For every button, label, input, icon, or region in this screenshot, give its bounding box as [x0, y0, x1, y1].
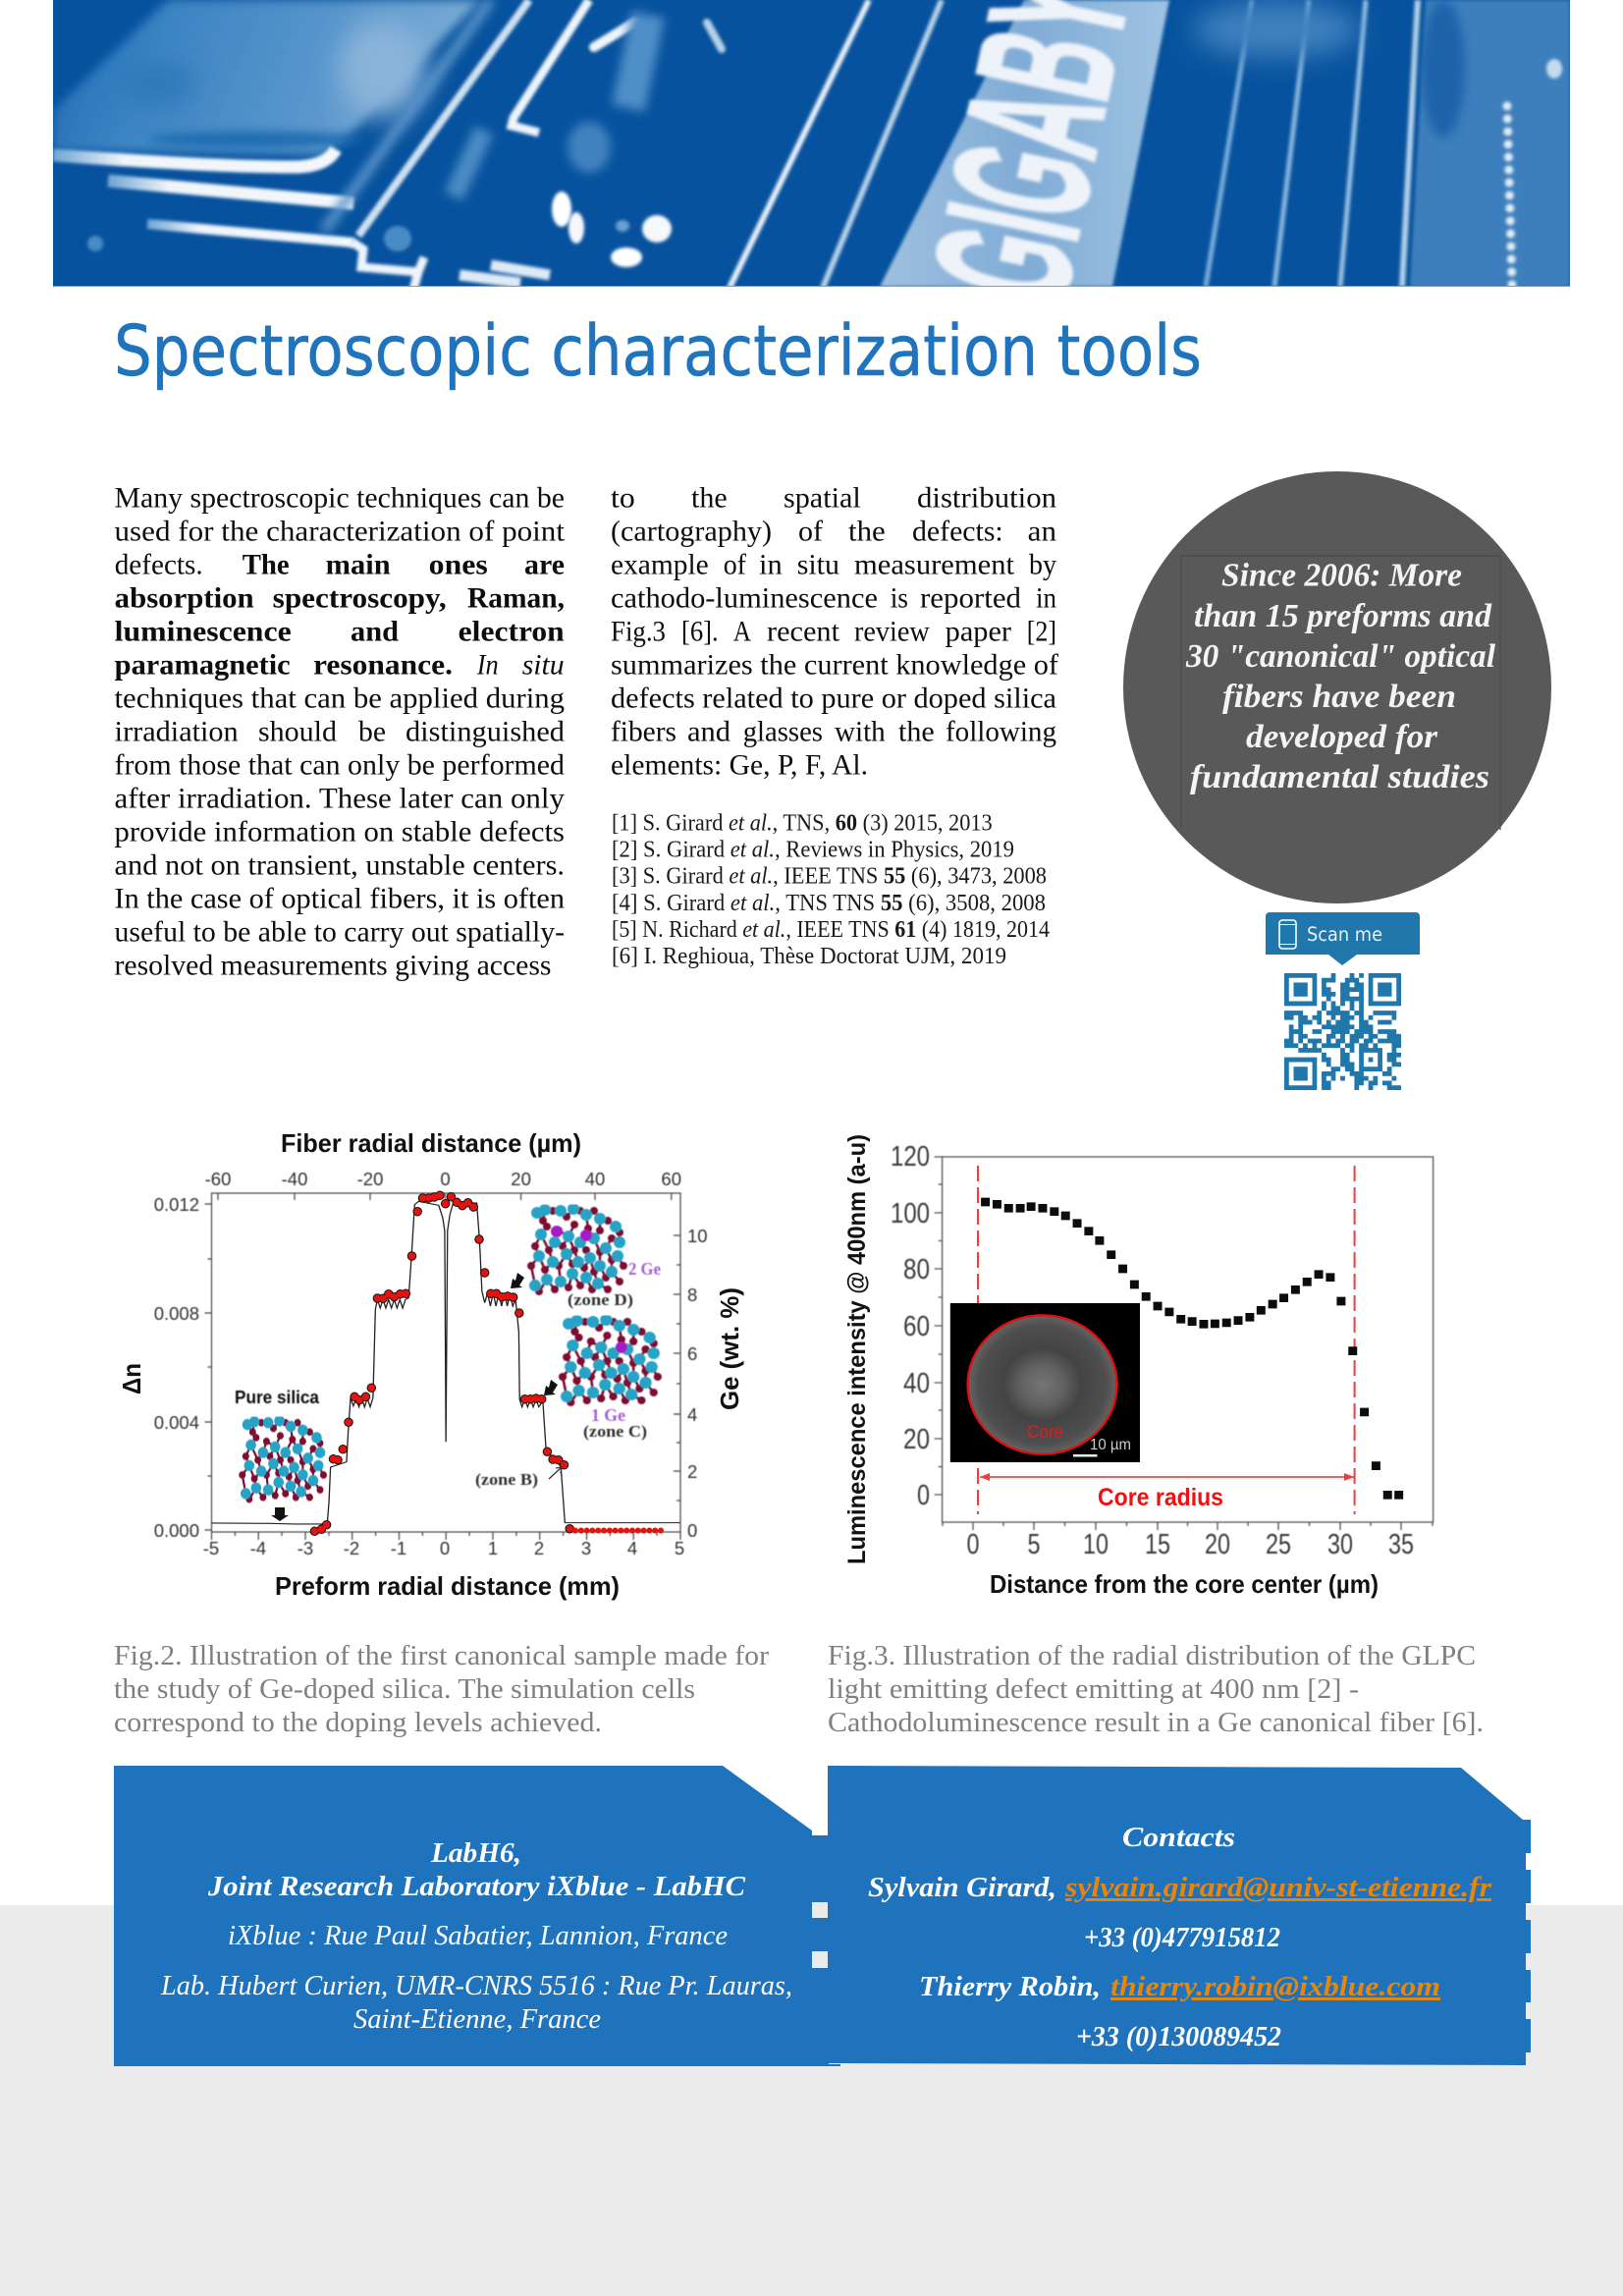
references list — [612, 810, 1050, 969]
top axis title: Fiber radial distance (µm) — [281, 1128, 581, 1158]
address text: Saint-Etienne, France — [353, 2003, 601, 2035]
caption: Fig.3 — [828, 1641, 1484, 1738]
text block: second body column: cathodo-luminescence — [611, 582, 878, 615]
axis tick labels: 20 — [511, 1169, 531, 1189]
inset: cathodoluminescence image — [950, 1303, 1140, 1462]
text block: second body column: summarizes the current knowledge of — [611, 649, 1058, 682]
text block: first body column: defects. — [115, 549, 203, 581]
text block: first body column: ones — [429, 549, 488, 581]
text block: second body column — [611, 482, 1058, 782]
text block: second body column: by — [1029, 549, 1056, 581]
text block: first body column: should — [258, 716, 337, 748]
text block: second body column: following — [946, 716, 1056, 748]
core radius arrow — [980, 1473, 1354, 1481]
text block: second body column: paper — [946, 616, 1011, 648]
text block: second body column: A — [733, 616, 751, 648]
axis tick labels: -1 — [391, 1538, 406, 1558]
text block: second body column: the — [898, 716, 935, 748]
axis tick labels: -2 — [344, 1538, 359, 1558]
x axis title: Distance from the core center (µm) — [990, 1569, 1379, 1599]
scan me tag: Scan me — [1307, 923, 1382, 946]
text block: second body column: with — [835, 716, 886, 748]
red dashed core limits — [978, 1166, 1355, 1514]
address text: Joint Research Laboratory iXblue - LabHC — [207, 1871, 746, 1902]
caption: Fig.3: Fig.3. Illustration of the radial distribution of the GLPC — [828, 1641, 1476, 1671]
axis tick labels: 0 — [440, 1169, 451, 1189]
annotation labels: 2 Ge — [628, 1259, 661, 1279]
axis tick labels: -40 — [282, 1169, 307, 1189]
axis tick labels: -3 — [298, 1538, 313, 1558]
address text: LabH6, — [430, 1837, 521, 1869]
callout text — [1185, 558, 1496, 795]
QR code — [1284, 973, 1401, 1090]
axis tick labels: 0 — [687, 1520, 697, 1541]
axis tick labels: 80 — [903, 1254, 930, 1285]
text block: first body column: electron — [459, 616, 565, 648]
text block: second body column: of — [798, 516, 823, 548]
caption: Fig.3: light emitting defect emitting at 400 nm [2] - — [828, 1674, 1359, 1705]
caption: Fig.2: Fig.2. Illustration of the first canonical sample made for — [114, 1641, 770, 1671]
core radius label: Core radius — [1098, 1484, 1223, 1511]
text block: second body column: to — [611, 482, 635, 515]
contact text: Sylvain Girard, — [868, 1872, 1056, 1903]
text block: first body column: techniques that can be applied during — [114, 683, 565, 715]
address text: Lab. Hubert Curien, UMR-CNRS 5516 : Rue Pr. Lauras, — [160, 1970, 792, 2001]
references list: [5] N. Richard et al., IEEE TNS 61 (4) 1819, 2014 — [612, 917, 1050, 943]
text block: first body column: are — [524, 549, 565, 581]
contact text: sylvain.girard@univ-st-etienne.fr — [1064, 1872, 1492, 1903]
inset: cathodoluminescence image: 10 µm — [1090, 1437, 1131, 1453]
text block: second body column: an — [1028, 516, 1056, 548]
contact text: +33 (0)130089452 — [1076, 2021, 1281, 2052]
text block: second body column: (cartography) — [611, 516, 772, 548]
text block: first body column: and — [351, 616, 399, 648]
text block: second body column: the — [848, 516, 886, 548]
text block: first body column: luminescence — [115, 616, 292, 648]
caption: Fig.2: the study of Ge-doped silica. The simulation cells — [114, 1674, 695, 1705]
inset: cathodoluminescence image: Core — [1027, 1422, 1063, 1442]
red data markers — [314, 1195, 666, 1531]
text block: first body column: from those that can only be performed — [114, 749, 565, 782]
axis tick labels: 100 — [891, 1198, 930, 1230]
icon: phone — [1279, 920, 1296, 949]
callout text: 30 "canonical" optical — [1185, 638, 1496, 675]
text block: first body column: and not on transient, unstable centers. — [114, 849, 565, 882]
scan me tag — [1266, 912, 1420, 965]
text block: first body column: useful to be able to carry out spatially- — [114, 916, 565, 949]
axis tick labels: -5 — [203, 1538, 219, 1558]
text block: second body column: Fig.3 — [611, 616, 666, 648]
text block: first body column: Raman, — [467, 582, 565, 615]
axis tick labels: 40 — [585, 1169, 605, 1189]
text block: first body column: provide information on stable defects — [114, 816, 565, 848]
contact text: Contacts — [1122, 1822, 1235, 1853]
callout: grey circle — [1123, 471, 1551, 903]
text block: second body column: defects related to pure or doped silica — [611, 683, 1056, 715]
text block: second body column: spatial — [784, 482, 861, 515]
references list: [4] S. Girard et al., TNS TNS 55 (6), 3508, 2008 — [612, 891, 1046, 916]
text block: first body column: paramagnetic — [115, 649, 291, 682]
text block: first body column: irradiation — [115, 716, 239, 748]
axis tick labels: 2 — [687, 1461, 697, 1482]
axis tick labels: 10 — [1083, 1529, 1109, 1560]
annotation labels: (zone D) — [568, 1290, 633, 1309]
axis tick labels: 0.000 — [154, 1520, 199, 1541]
chart: Fig.3 luminescence radial profile — [843, 1134, 1434, 1599]
text block: first body column: situ — [522, 649, 565, 682]
text block: first body column: absorption — [115, 582, 254, 615]
text block: first body column: Many spectroscopic techniques can be — [114, 482, 565, 515]
contact text: +33 (0)477915812 — [1084, 1922, 1280, 1953]
text block: second body column: defects: — [912, 516, 1003, 548]
panel: laboratory address — [114, 1766, 840, 2066]
text block: second body column: and — [687, 716, 730, 748]
axis tick labels: 15 — [1145, 1529, 1170, 1560]
axis tick labels: 3 — [581, 1538, 591, 1558]
axis tick labels: 10 — [687, 1226, 708, 1246]
text block: second body column: elements: Ge, P, F, Al. — [611, 749, 868, 782]
callout text: developed for — [1246, 719, 1438, 755]
axis tick labels: 20 — [1205, 1529, 1230, 1560]
axis tick labels: 0 — [966, 1529, 980, 1560]
axis tick labels: 4 — [627, 1538, 637, 1558]
text block: first body column: distinguished — [406, 716, 565, 748]
text block: second body column: distribution — [917, 482, 1056, 515]
annotation labels: (zone C) — [583, 1422, 647, 1441]
axis tick labels — [154, 1169, 708, 1558]
text block: second body column: is — [891, 582, 908, 615]
text block: first body column: main — [326, 549, 391, 581]
bottom axis title: Preform radial distance (mm) — [275, 1571, 620, 1601]
text block: first body column: In the case of optical fibers, it is often — [114, 883, 565, 915]
text block: second body column: measurement — [854, 549, 1015, 581]
axis tick labels: 5 — [1027, 1529, 1041, 1560]
axis tick labels: 0 — [917, 1480, 930, 1511]
annotation labels — [235, 1259, 661, 1489]
text block: first body column: The — [243, 549, 290, 581]
text block: second body column: situ — [797, 549, 839, 581]
text block: second body column: in — [1036, 582, 1056, 615]
axis tick labels: 35 — [1388, 1529, 1414, 1560]
axis tick labels: -60 — [205, 1169, 231, 1189]
axis tick labels: 4 — [687, 1404, 697, 1425]
text block: second body column: the — [691, 482, 728, 515]
axis tick labels: 0.004 — [154, 1412, 199, 1433]
axis tick labels: 0 — [440, 1538, 450, 1558]
text block: first body column — [114, 482, 566, 982]
axis tick labels: 0.008 — [154, 1303, 199, 1324]
chart: Fig.2 refractive index profile — [117, 1128, 744, 1601]
caption: Fig.3: Cathodoluminescence result in a Ge canonical fiber [6]. — [828, 1708, 1484, 1738]
references list: [6] I. Reghioua, Thèse Doctorat UJM, 2019 — [612, 944, 1006, 969]
molecule: 2 Ge cell — [531, 1209, 623, 1291]
text block: second body column: glasses — [743, 716, 823, 748]
axis tick labels: 6 — [687, 1343, 697, 1364]
text block: first body column: after irradiation. These later can only — [114, 783, 565, 815]
axis tick labels: 120 — [891, 1141, 930, 1173]
callout text: than 15 preforms and — [1194, 598, 1492, 634]
axis tick labels — [891, 1141, 1414, 1560]
text block: second body column: of — [724, 549, 746, 581]
text block: second body column: recent — [767, 616, 840, 648]
caption: Fig.2: correspond to the doping levels achieved. — [114, 1708, 602, 1738]
text block: second body column: fibers — [611, 716, 676, 748]
y axis title: Luminescence intensity @ 400nm (a-u) — [843, 1134, 871, 1564]
axis tick labels: -20 — [357, 1169, 383, 1189]
text block: second body column: review — [854, 616, 930, 648]
contact text — [868, 1822, 1492, 2052]
page background band — [0, 1905, 1623, 2296]
title: Spectroscopic characterization tools — [114, 310, 1202, 392]
text block: first body column: resonance. — [313, 649, 453, 682]
axis tick labels: -4 — [250, 1538, 266, 1558]
axis tick labels: 0.012 — [154, 1194, 199, 1215]
text block: first body column: In — [476, 649, 499, 682]
annotation labels: (zone B) — [475, 1470, 538, 1489]
references list: [3] S. Girard et al., IEEE TNS 55 (6), 3473, 2008 — [612, 864, 1047, 890]
text block: second body column: [6]. — [681, 616, 719, 648]
axis tick labels: 2 — [534, 1538, 544, 1558]
axis tick labels: 20 — [903, 1424, 930, 1455]
text block: first body column: used for the characterization of point — [114, 516, 566, 548]
callout text: fundamental studies — [1190, 759, 1489, 795]
molecule: pure silica cell — [243, 1421, 323, 1500]
axis tick labels: 25 — [1266, 1529, 1291, 1560]
text block: second body column: example — [611, 549, 709, 581]
axis tick labels: 5 — [675, 1538, 684, 1558]
axis tick labels: 1 — [488, 1538, 498, 1558]
axis tick labels: 30 — [1327, 1529, 1353, 1560]
plot frame and ticks — [204, 1193, 680, 1540]
text block: first body column: spectroscopy, — [273, 582, 447, 615]
banner photo: circuit board — [53, 0, 1570, 316]
text block: second body column: [2] — [1027, 616, 1056, 648]
arrows to zones — [271, 1273, 562, 1521]
data points — [981, 1198, 1403, 1500]
axis tick labels: 60 — [661, 1169, 681, 1189]
text block: first body column: resolved measurements giving access — [114, 950, 552, 982]
annotation labels: 1 Ge — [591, 1405, 625, 1425]
axis tick labels: 60 — [903, 1311, 930, 1342]
annotation labels: Pure silica — [235, 1388, 320, 1407]
plot frame and ticks — [935, 1157, 1434, 1530]
contact text: thierry.robin@ixblue.com — [1110, 1971, 1440, 2002]
text block: second body column: reported — [920, 582, 1021, 615]
contact text: Thierry Robin, — [919, 1971, 1101, 2002]
address text — [160, 1837, 792, 2035]
text block: first body column: be — [358, 716, 386, 748]
address text: iXblue : Rue Paul Sabatier, Lannion, France — [228, 1920, 728, 1951]
molecule: 1 Ge cell — [563, 1320, 658, 1402]
left axis title: Δn — [117, 1363, 146, 1394]
callout text: fibers have been — [1222, 679, 1456, 715]
caption: Fig.2 — [114, 1641, 770, 1738]
profile curve — [211, 1201, 680, 1524]
right axis title: Ge (wt. %) — [715, 1287, 744, 1410]
axis tick labels: 40 — [903, 1368, 930, 1399]
panel: contacts — [828, 1766, 1531, 2065]
callout text: Since 2006: More — [1221, 558, 1462, 593]
text block: second body column: in — [759, 549, 783, 581]
references list: [1] S. Girard et al., TNS, 60 (3) 2015, 2013 — [612, 810, 993, 836]
axis tick labels: 8 — [687, 1285, 697, 1305]
references list: [2] S. Girard et al., Reviews in Physics, 2019 — [612, 837, 1014, 862]
